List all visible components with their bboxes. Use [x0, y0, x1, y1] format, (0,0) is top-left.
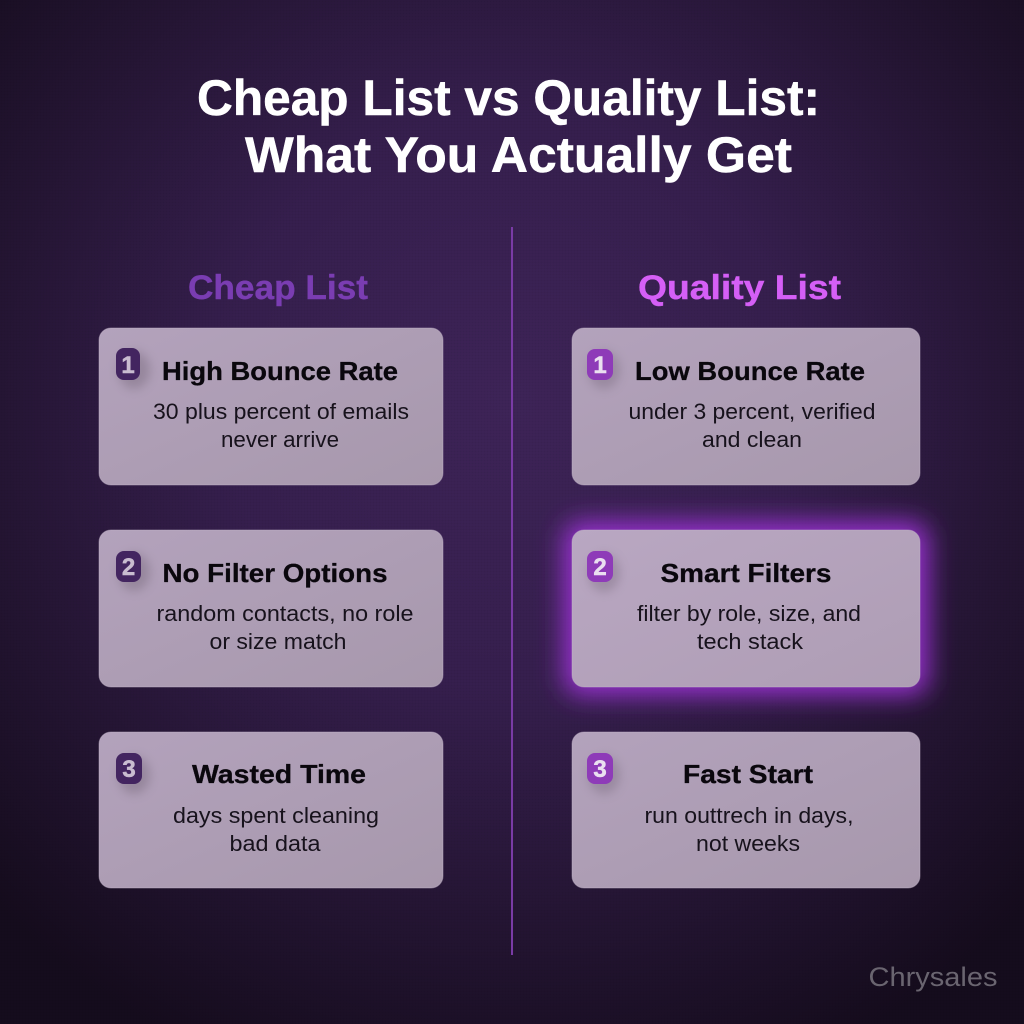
- card: Wasted Time: days spent cleaning: [173, 803, 379, 828]
- card: High Bounce Rate: High Bounce Rate: [162, 356, 398, 386]
- card: Low Bounce Rate: [572, 328, 920, 485]
- card: Wasted Time: [99, 732, 443, 888]
- center divider: [511, 227, 513, 955]
- card: No Filter Options: random contacts, no role: [156, 601, 414, 626]
- card: No Filter Options: 2: [122, 554, 135, 581]
- card: Smart Filters (highlighted): filter by role, size, and: [637, 601, 861, 626]
- card: Smart Filters (highlighted): tech stack: [697, 629, 804, 654]
- card: Low Bounce Rate: 1: [593, 352, 607, 379]
- title: What You Actually Get: [245, 127, 792, 183]
- brand wordmark: Chrysales: [868, 962, 998, 992]
- heading: Cheap List: Cheap List: [188, 269, 368, 307]
- card: High Bounce Rate: 1: [121, 352, 135, 379]
- card: Wasted Time: Wasted Time: [192, 759, 366, 789]
- card: Fast Start: run outtrech in days,: [644, 803, 854, 828]
- card: Fast Start: 3: [593, 756, 607, 783]
- card: High Bounce Rate: 30 plus percent of emails: [153, 399, 409, 424]
- card: Fast Start: not weeks: [696, 831, 800, 856]
- title: [197, 70, 820, 183]
- card: No Filter Options: No Filter Options: [162, 558, 388, 588]
- card: Low Bounce Rate: under 3 percent, verified: [628, 399, 876, 424]
- card: Fast Start: Fast Start: [683, 759, 813, 789]
- card: Low Bounce Rate: and clean: [702, 427, 802, 452]
- card: Fast Start: [572, 732, 920, 888]
- card: No Filter Options: [99, 530, 443, 687]
- heading: Quality List: Quality List: [638, 269, 841, 307]
- card: Smart Filters (highlighted): Smart Filters: [660, 558, 832, 588]
- card: Wasted Time: bad data: [230, 831, 321, 856]
- title: Cheap List vs Quality List:: [197, 70, 820, 126]
- panel: cheap list column: [99, 328, 443, 888]
- panel: quality list column: [564, 328, 928, 888]
- card: No Filter Options: or size match: [210, 629, 346, 654]
- card: Low Bounce Rate: Low Bounce Rate: [635, 356, 865, 386]
- card: Smart Filters (highlighted): 2: [593, 554, 607, 581]
- card: High Bounce Rate: [99, 328, 443, 485]
- card: Wasted Time: 3: [122, 756, 136, 783]
- card: High Bounce Rate: never arrive: [221, 427, 339, 452]
- card: Smart Filters (highlighted): [564, 522, 928, 695]
